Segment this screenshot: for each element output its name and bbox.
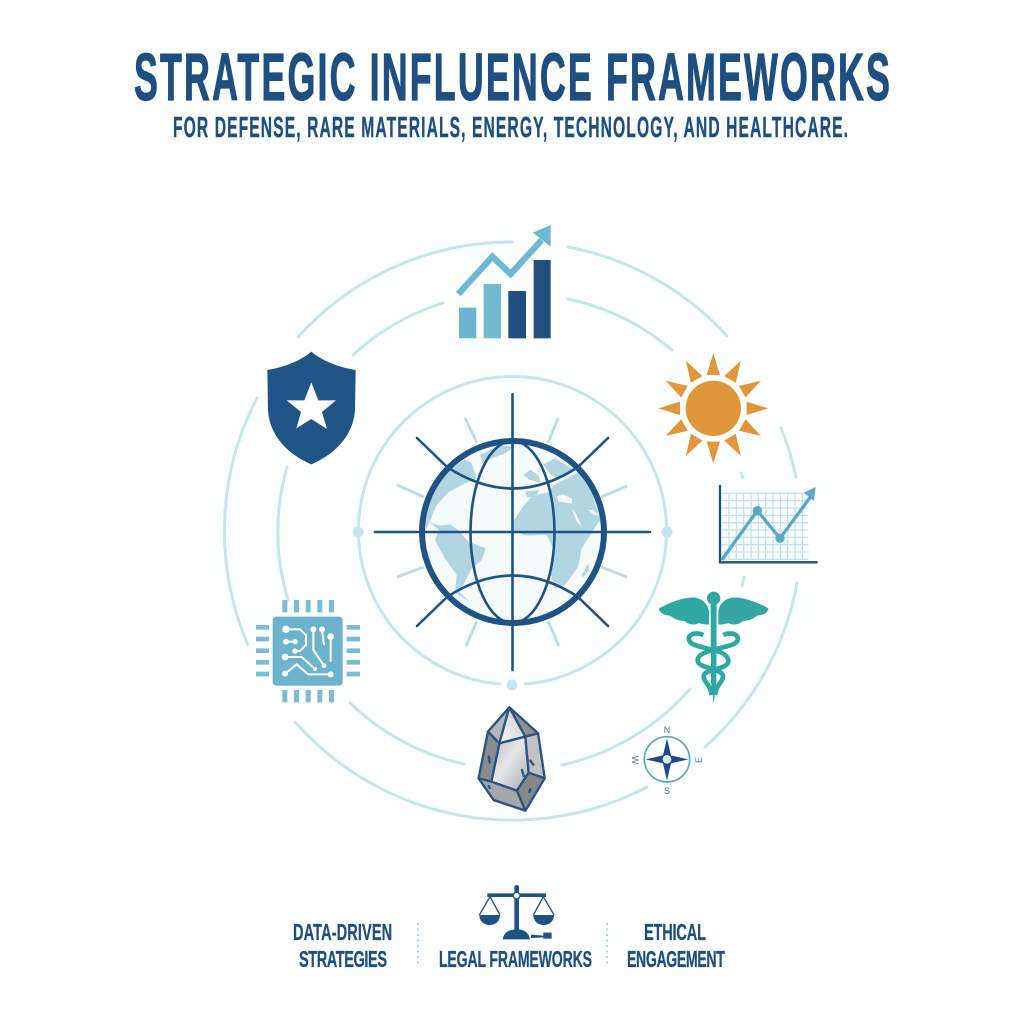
icon: bar chart with arrow	[458, 225, 551, 338]
icon: line chart	[720, 485, 818, 562]
sea highlights	[435, 494, 599, 528]
compass letters: W	[630, 756, 640, 765]
bottom label: legal frameworks: LEGAL FRAMEWORKS	[439, 946, 592, 973]
bottom label: ethical engagement	[627, 920, 725, 973]
icon: compass	[630, 725, 704, 796]
light rays	[397, 418, 627, 646]
bottom label: data-driven strategies	[293, 920, 392, 973]
bottom label: ethical engagement: ETHICAL	[644, 920, 706, 946]
icon: shield with star	[267, 352, 356, 464]
ring node dots	[352, 526, 672, 690]
icon: microchip	[256, 600, 360, 702]
compass letters: N	[664, 725, 670, 735]
outer ring arcs	[224, 242, 797, 820]
compass letters: E	[694, 757, 704, 763]
dotted dividers	[418, 923, 607, 967]
orbit rings	[224, 242, 797, 820]
subtitle: FOR DEFENSE, RARE MATERIALS, ENERGY, TECHNOLOGY, AND HEALTHCARE.	[173, 111, 848, 143]
inner ring	[358, 377, 667, 684]
icon: caduceus	[659, 592, 768, 704]
middle ring arcs	[278, 299, 744, 765]
compass letters: S	[664, 786, 670, 796]
globe face	[422, 441, 604, 623]
title: STRATEGIC INFLUENCE FRAMEWORKS	[134, 40, 890, 115]
bottom label: ethical engagement: ENGAGEMENT	[627, 946, 725, 973]
continents	[424, 446, 600, 602]
globe grid lines	[375, 394, 650, 670]
bottom label: data-driven strategies: DATA-DRIVEN	[293, 920, 392, 946]
icon: rare material crystal	[479, 707, 545, 811]
icon: sun	[658, 353, 768, 463]
bottom label: data-driven strategies: STRATEGIES	[299, 947, 387, 973]
compass letters	[630, 725, 704, 796]
central globe	[375, 394, 650, 670]
icon: scales of justice	[479, 885, 554, 939]
